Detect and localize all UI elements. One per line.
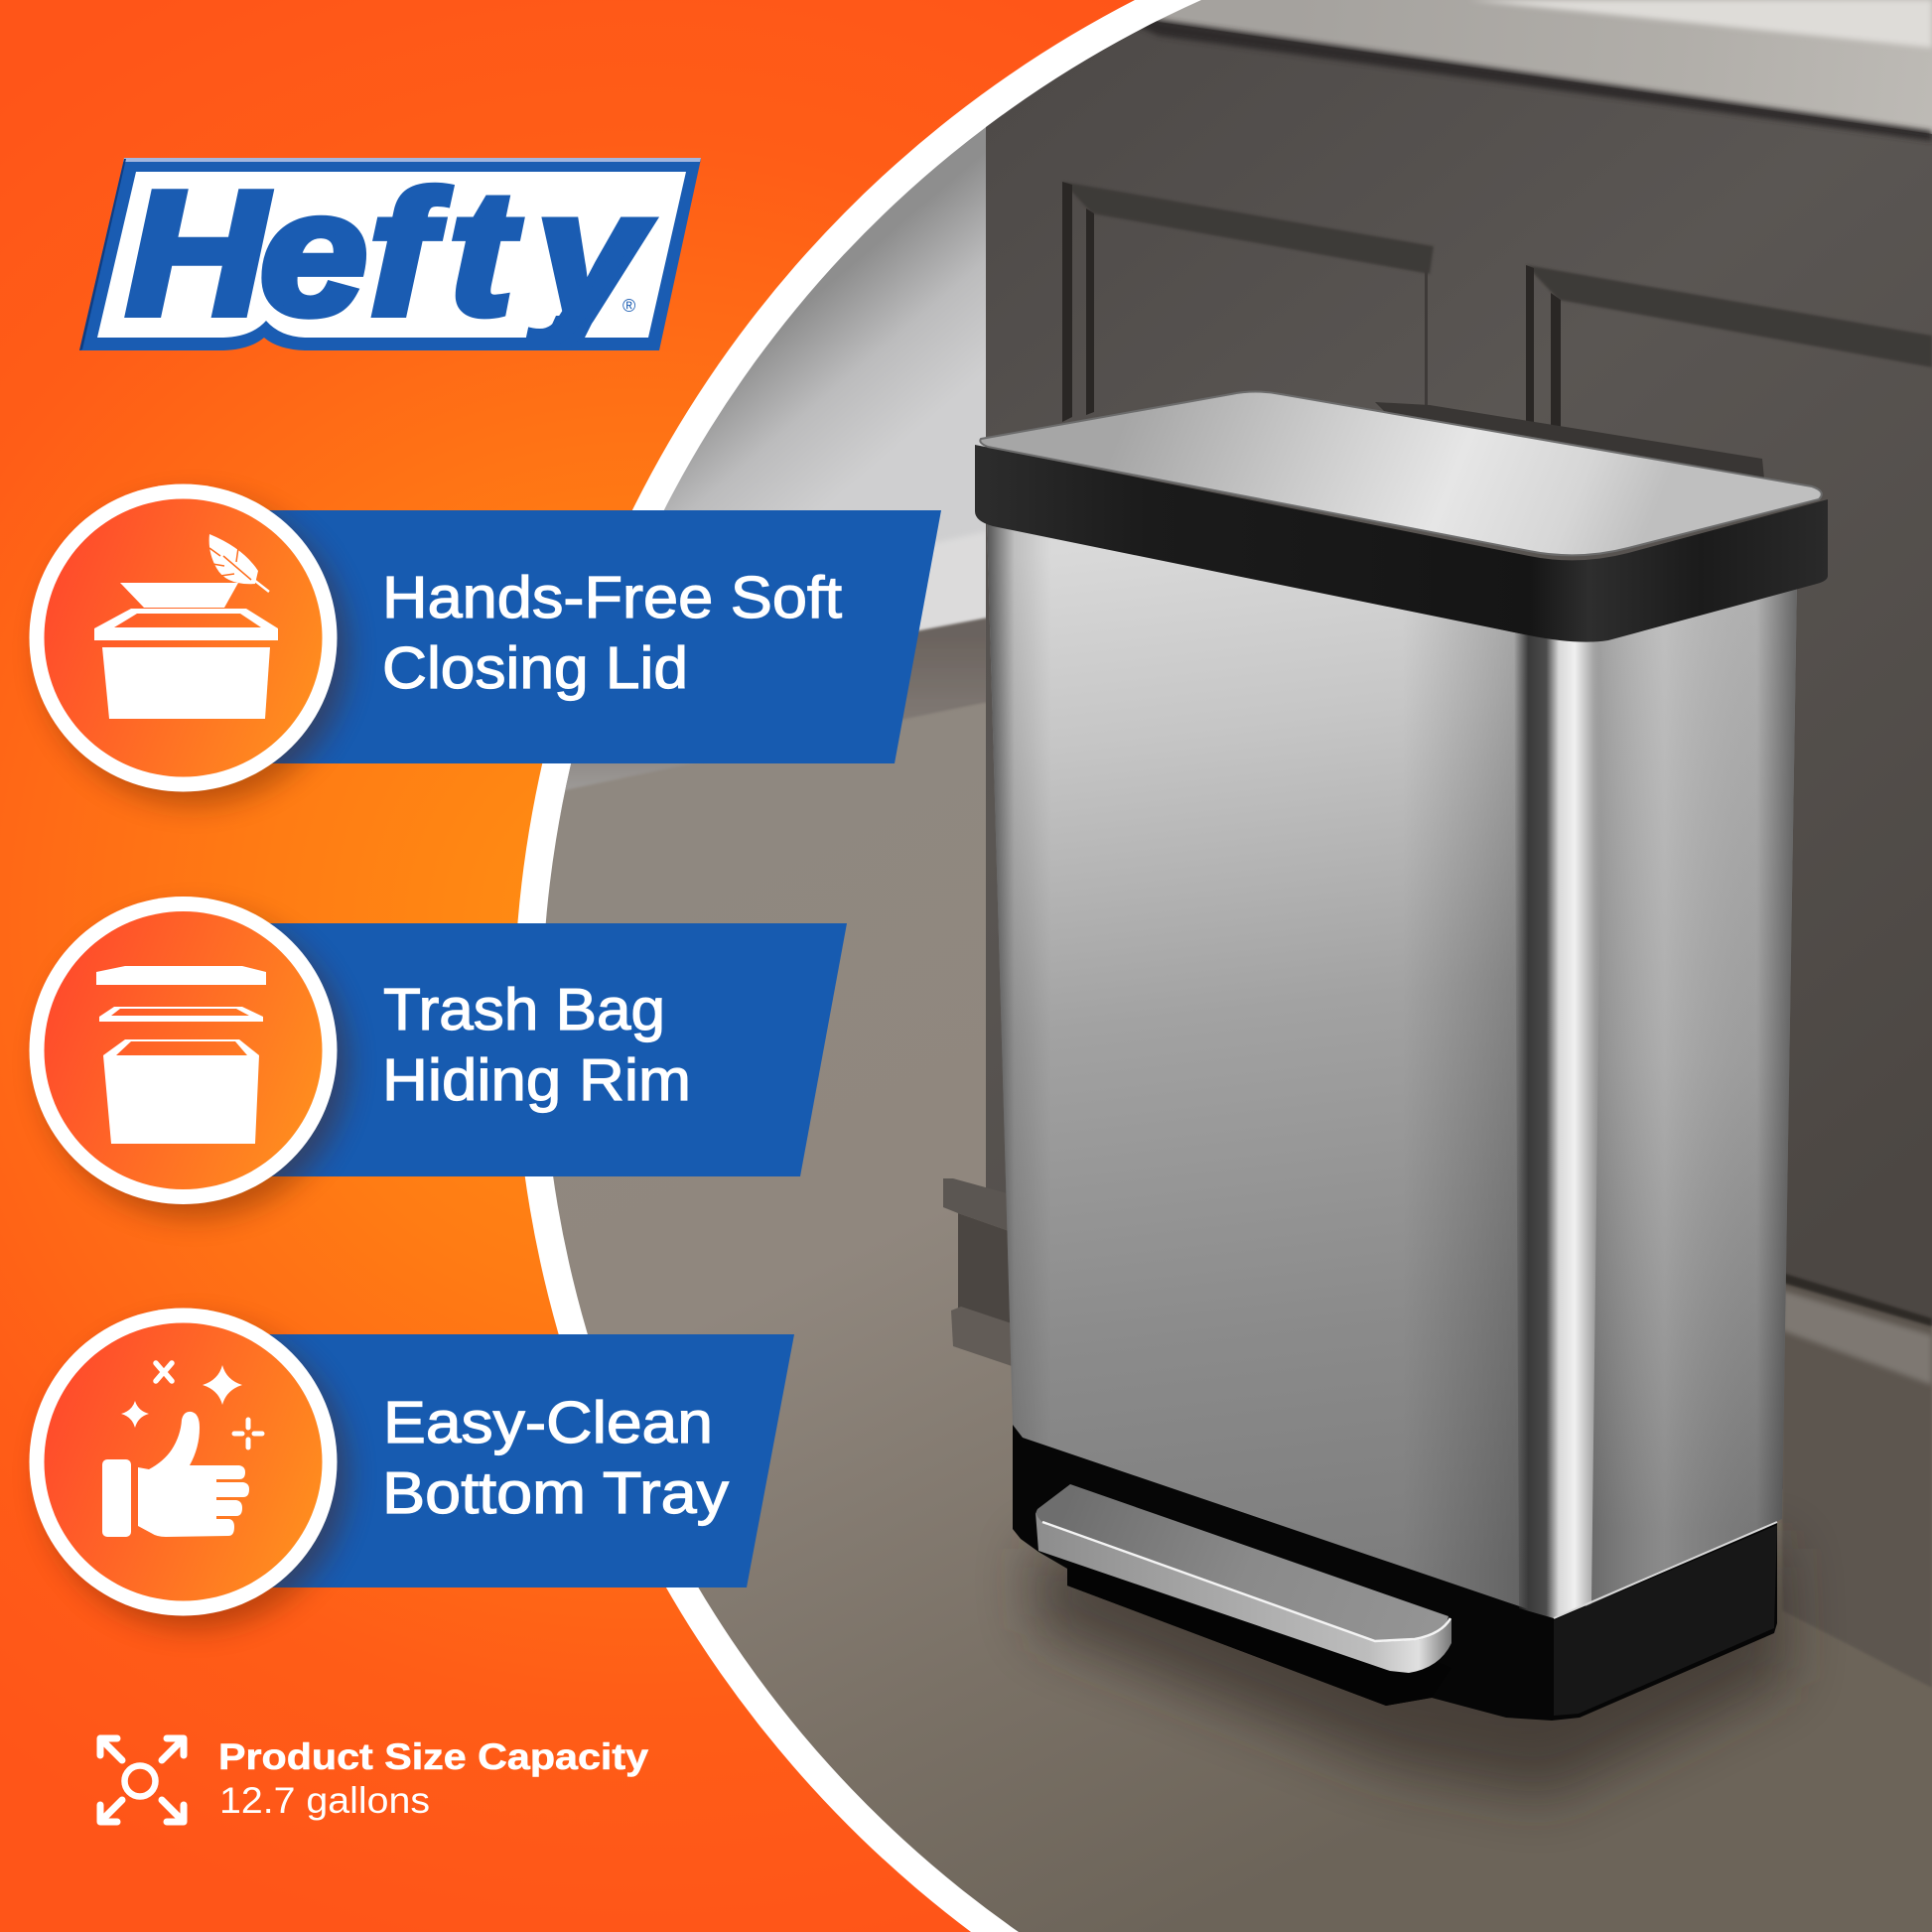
cabinet door two (1526, 265, 1932, 427)
black base (1013, 1420, 1777, 1721)
banner three text: Bottom Tray (382, 1460, 730, 1526)
icon: feather (209, 534, 269, 592)
feature three banner (238, 1334, 794, 1587)
badge three ring (30, 1309, 338, 1616)
floor back band (565, 616, 986, 790)
logo top highlight (123, 158, 701, 162)
badge two shadow (41, 910, 348, 1218)
wall (560, 115, 1003, 814)
banner two text: Trash Bag (383, 977, 665, 1042)
badge two disc (44, 911, 322, 1189)
icon: hiding rim (99, 1007, 263, 1022)
banner one text (382, 565, 842, 701)
body corner highlight (1514, 631, 1603, 1618)
body front face (987, 521, 1549, 1616)
kitchen scene (477, 0, 1932, 1932)
base side sheen (1554, 1525, 1777, 1716)
baseboard right (1782, 1276, 1932, 1688)
pedal front face (1035, 1512, 1451, 1673)
pedal highlight (1042, 1522, 1450, 1641)
cabinet lower line (1782, 1273, 1932, 1326)
door one left groove (1062, 182, 1072, 422)
logo wordmark: Hefty (126, 156, 652, 351)
feature one banner (238, 510, 941, 763)
banner one background (238, 510, 941, 763)
stainless trash can (975, 391, 1828, 1721)
badge one shadow (41, 497, 348, 805)
baseboard right highlight (1782, 1291, 1932, 1385)
banner one text: Hands-Free Soft (382, 565, 842, 630)
banner three text: Easy-Clean (383, 1390, 713, 1455)
skirting board (919, 534, 986, 629)
badge two ring (30, 897, 338, 1204)
white curved border (514, 0, 1932, 1932)
banner three text (382, 1390, 730, 1526)
under pedal shadow (1067, 1529, 1451, 1706)
Hefty logo (79, 156, 701, 351)
door one inner groove (1086, 208, 1094, 415)
door two rail (1526, 265, 1932, 367)
cabinet top shadow (1140, 16, 1932, 143)
icon: large sparkle (203, 1365, 242, 1405)
icon: expand arrows (100, 1738, 184, 1822)
badge three disc (44, 1322, 322, 1600)
plinth block upper (943, 1178, 1007, 1231)
logo registered mark: ® (622, 296, 635, 316)
plinth block lower (951, 1307, 1011, 1366)
logo white field (97, 172, 686, 338)
lid black rim (975, 445, 1828, 642)
icon: thumbs up hand (138, 1412, 249, 1537)
icon: lid (96, 966, 266, 985)
base edge highlight (1554, 1522, 1777, 1618)
banner two text (382, 977, 691, 1113)
icon badge: hiding rim (30, 897, 348, 1218)
banner two text: Hiding Rim (382, 1047, 691, 1113)
countertop (1155, 0, 1932, 134)
capacity label: Product Size Capacity (218, 1736, 648, 1777)
icon: open lid (120, 583, 238, 608)
pedal top face (1036, 1484, 1449, 1642)
door two left groove (1526, 265, 1534, 422)
banner one text: Closing Lid (382, 635, 688, 701)
capacity value: 12.7 gallons (219, 1780, 430, 1821)
door one right edge (1425, 268, 1428, 407)
hinge strip (1375, 402, 1764, 486)
lid silver top (980, 391, 1822, 555)
door two inner groove (1551, 293, 1561, 427)
icon: small sparkle (121, 1401, 149, 1428)
body front shading (987, 521, 1549, 1616)
floor (477, 695, 1932, 1932)
logo left shadow (79, 159, 126, 350)
floor shadow under bin (1033, 1549, 1787, 1797)
banner two background (238, 923, 847, 1176)
door one rail (1062, 182, 1434, 274)
icon: thumb cuff (102, 1459, 131, 1537)
capacity note (100, 1736, 648, 1822)
cabinet (986, 0, 1932, 1489)
icon: bin body (102, 647, 270, 719)
cabinet door one (1062, 182, 1434, 422)
badge three shadow (41, 1321, 348, 1629)
banner three background (238, 1334, 794, 1587)
countertop highlight (1469, 0, 1932, 48)
icon badge: soft closing lid (30, 484, 348, 805)
logo blue badge (79, 159, 701, 350)
badge one disc (44, 498, 322, 776)
icon: plus sparkle (234, 1420, 262, 1448)
icon: cross sparkle (156, 1363, 172, 1381)
icon badge: easy clean (30, 1309, 348, 1629)
feature two banner (238, 923, 847, 1176)
icon: bin rim (94, 609, 278, 640)
badge one ring (30, 484, 338, 792)
icon: bin (103, 1039, 259, 1144)
body right shading (1586, 581, 1797, 1606)
plinth dark column (958, 1213, 1010, 1322)
body right face (1586, 581, 1797, 1606)
